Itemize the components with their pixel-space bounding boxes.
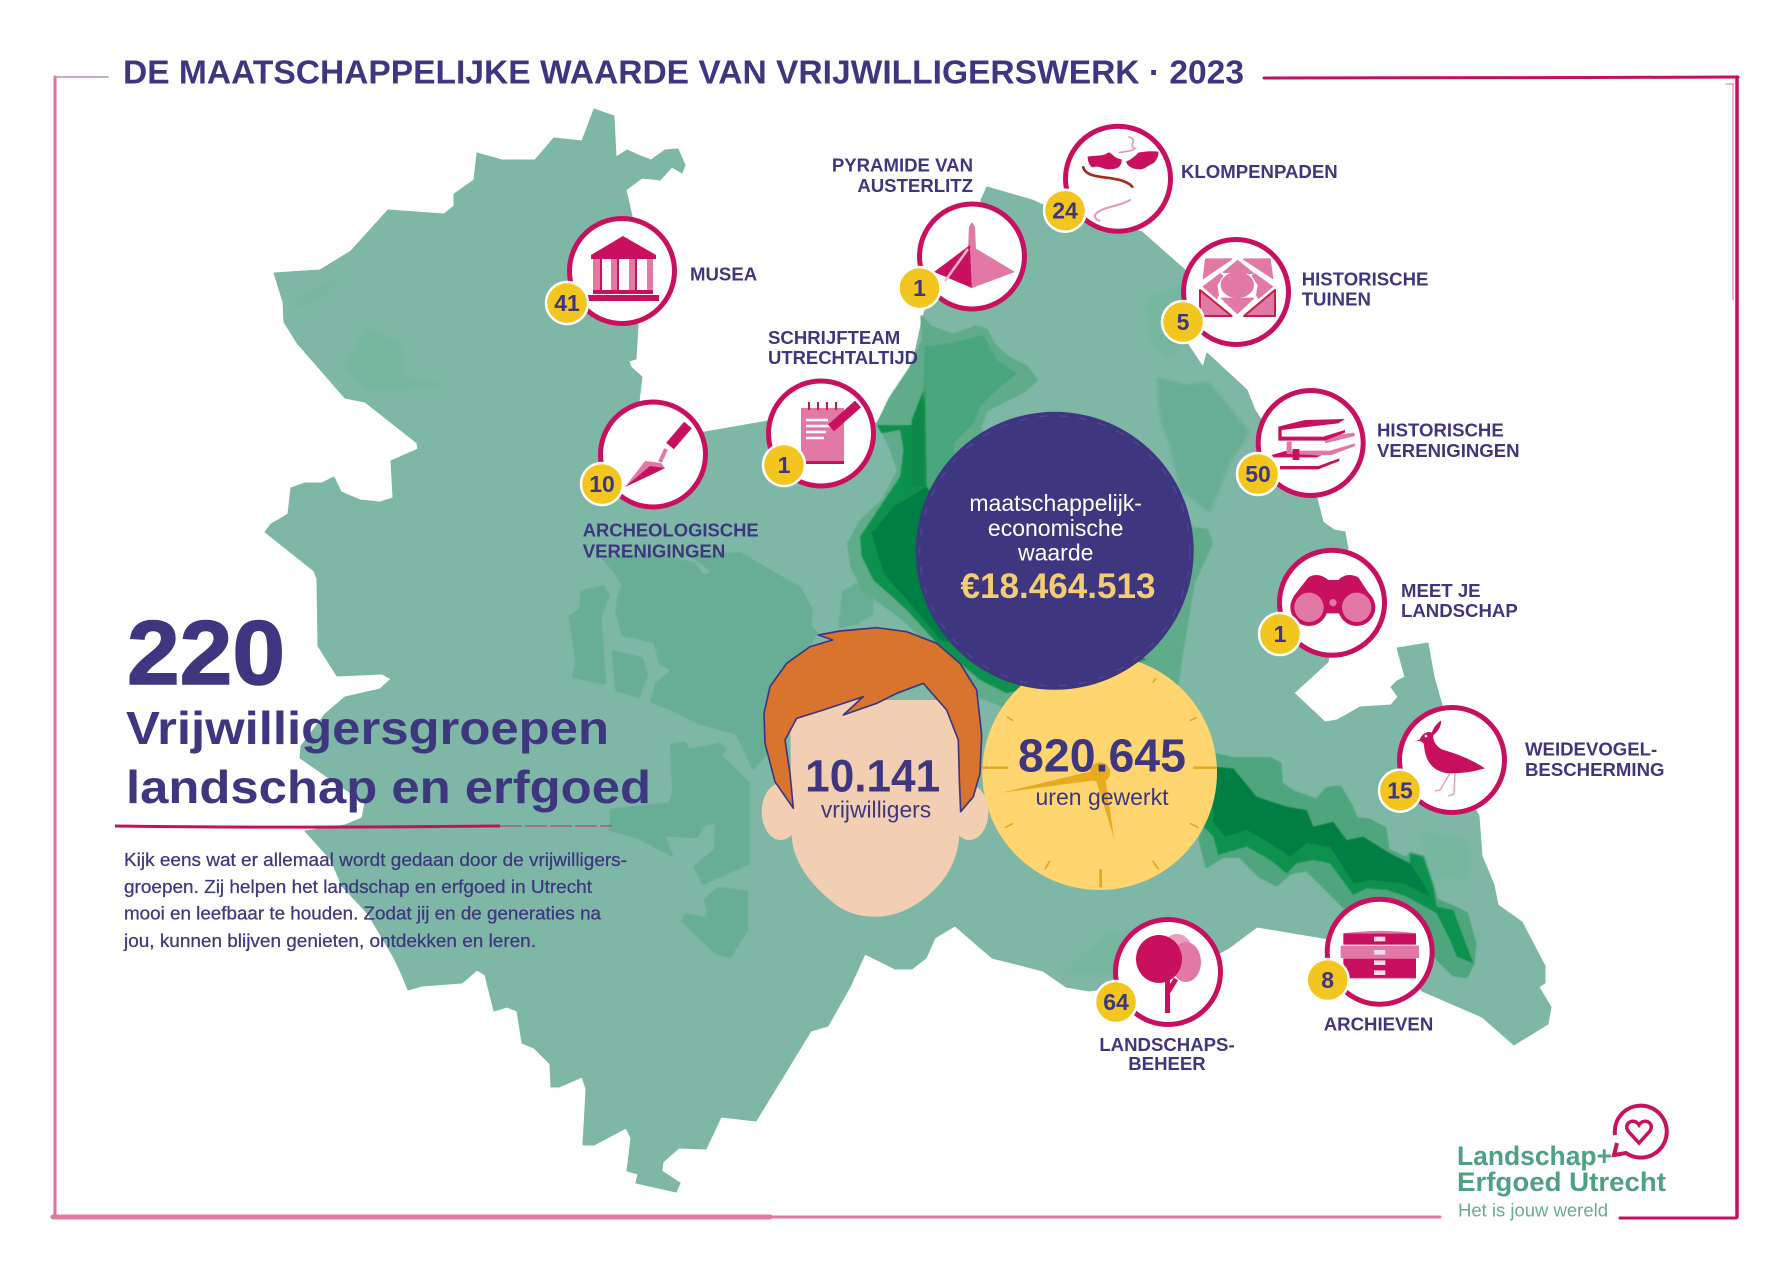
group: Pyramide van Austerlitz: AUSTERLITZ — [857, 175, 973, 196]
group: Archieven: 8 — [1321, 967, 1334, 993]
group: Landschapsbeheer: 64 — [1103, 989, 1129, 1015]
group: Archieven — [1307, 899, 1433, 1034]
icon: speech bubble with heart — [1614, 1106, 1667, 1158]
group: Weidevogelbescherming: BESCHERMING — [1525, 759, 1664, 780]
icon: archive drawers — [1341, 931, 1419, 978]
group: Musea: 41 — [554, 290, 580, 316]
intro text — [123, 849, 627, 951]
darker map areas — [570, 553, 872, 957]
group: Historische verenigingen: 50 — [1245, 461, 1271, 487]
forest ridge north — [848, 317, 1212, 710]
volunteer head: vrijwilligers — [821, 796, 931, 822]
group: Schrijfteam UtrechtAltijd: SCHRIJFTEAM — [768, 327, 900, 348]
headline subject: Vrijwilligersgroepen — [126, 702, 609, 754]
intro text: Kijk eens wat er allemaal wordt gedaan door de vrijwilligers- — [124, 849, 627, 870]
group: Historische verenigingen: HISTORISCHE — [1377, 420, 1504, 441]
group: Landschapsbeheer: LANDSCHAPS- — [1099, 1034, 1235, 1055]
group: Archieven: ARCHIEVEN — [1324, 1014, 1433, 1034]
navy value circle — [916, 412, 1194, 690]
group: Schrijfteam UtrechtAltijd: UTRECHTALTIJD — [768, 347, 918, 368]
group: Schrijfteam UtrechtAltijd: 1 — [778, 452, 791, 478]
intro text: mooi en leefbaar te houden. Zodat jij en de generaties na — [124, 903, 602, 924]
group: Landschapsbeheer: BEHEER — [1128, 1053, 1206, 1074]
group: Meet je landschap: 1 — [1274, 621, 1287, 647]
group: Schrijfteam UtrechtAltijd — [763, 327, 918, 486]
intro text: groepen. Zij helpen het landschap en erfgoed in Utrecht — [124, 876, 592, 897]
headline subject: landschap en erfgoed — [126, 761, 651, 813]
map of Utrecht province — [265, 109, 1551, 1192]
volunteer head — [762, 628, 988, 917]
logo — [1457, 1106, 1667, 1221]
group: Weidevogelbescherming: 15 — [1387, 778, 1413, 804]
group: Archeologische verenigingen: ARCHEOLOGISCHE — [583, 520, 759, 541]
icon: clogs and paths — [1083, 137, 1158, 221]
navy value circle: maatschappelijk- — [969, 490, 1142, 516]
group: Musea: MUSEA — [690, 264, 757, 285]
navy value circle: economische — [988, 515, 1123, 541]
icon: notepad — [801, 402, 858, 464]
clock text: 820.645 — [1018, 730, 1186, 782]
intro text: jou, kunnen blijven genieten, ontdekken en leren. — [123, 930, 536, 951]
clock text: uren gewerkt — [1036, 784, 1169, 810]
group: Historische tuinen: TUINEN — [1302, 289, 1371, 310]
headline count: 220 — [127, 603, 285, 704]
group: Historische tuinen — [1162, 240, 1428, 344]
icon: binoculars — [1290, 575, 1375, 626]
group: Archeologische verenigingen: VERENIGINGEN — [583, 541, 725, 562]
group: Pyramide van Austerlitz: PYRAMIDE VAN — [832, 154, 973, 175]
group: Historische tuinen: 5 — [1177, 309, 1190, 335]
icon: books — [1272, 419, 1355, 469]
icon: lapwing — [1414, 721, 1485, 796]
group: Meet je landschap: MEET JE — [1401, 580, 1481, 601]
navy value circle: €18.464.513 — [960, 567, 1156, 606]
group: Pyramide van Austerlitz: 1 — [913, 275, 926, 301]
icon: museum — [588, 236, 659, 301]
icon: pyramid — [934, 222, 1015, 288]
logo: Landschap+ — [1457, 1141, 1612, 1171]
logo: Erfgoed Utrecht — [1457, 1167, 1666, 1197]
lighter map patches — [294, 272, 1470, 975]
volunteer head: 10.141 — [805, 751, 940, 802]
group: Meet je landschap: LANDSCHAP — [1401, 600, 1518, 621]
icon: trowel — [625, 425, 688, 487]
headline subject — [126, 702, 651, 813]
group: Meet je landschap — [1259, 550, 1518, 655]
clock text — [1018, 730, 1186, 810]
icon: garden plan — [1200, 259, 1275, 316]
group: Pyramide van Austerlitz — [832, 154, 1024, 309]
navy value circle: waarde — [1017, 540, 1093, 566]
group: Weidevogelbescherming: WEIDEVOGEL- — [1525, 738, 1657, 760]
clock: hours worked — [982, 655, 1217, 890]
group: Archeologische verenigingen — [581, 402, 759, 562]
forest ridge south-east — [1200, 753, 1475, 977]
group: Archeologische verenigingen: 10 — [589, 471, 615, 497]
group: Klompenpaden — [1044, 126, 1338, 232]
group: Klompenpaden: KLOMPENPADEN — [1181, 161, 1338, 182]
group: Weidevogelbescherming — [1379, 708, 1664, 812]
group: Historische tuinen: HISTORISCHE — [1302, 269, 1428, 290]
group: Klompenpaden: 24 — [1052, 198, 1078, 224]
group: Musea — [546, 218, 757, 324]
logo: Het is jouw wereld — [1458, 1200, 1608, 1221]
group: Historische verenigingen: VERENIGINGEN — [1377, 440, 1520, 461]
title: DE MAATSCHAPPELIJKE WAARDE VAN VRIJWILLIGERSWERK · 2023 — [123, 55, 1244, 92]
group: Historische verenigingen — [1237, 390, 1520, 496]
group: Landschapsbeheer — [1095, 920, 1235, 1074]
icon: tree — [1136, 934, 1201, 1013]
